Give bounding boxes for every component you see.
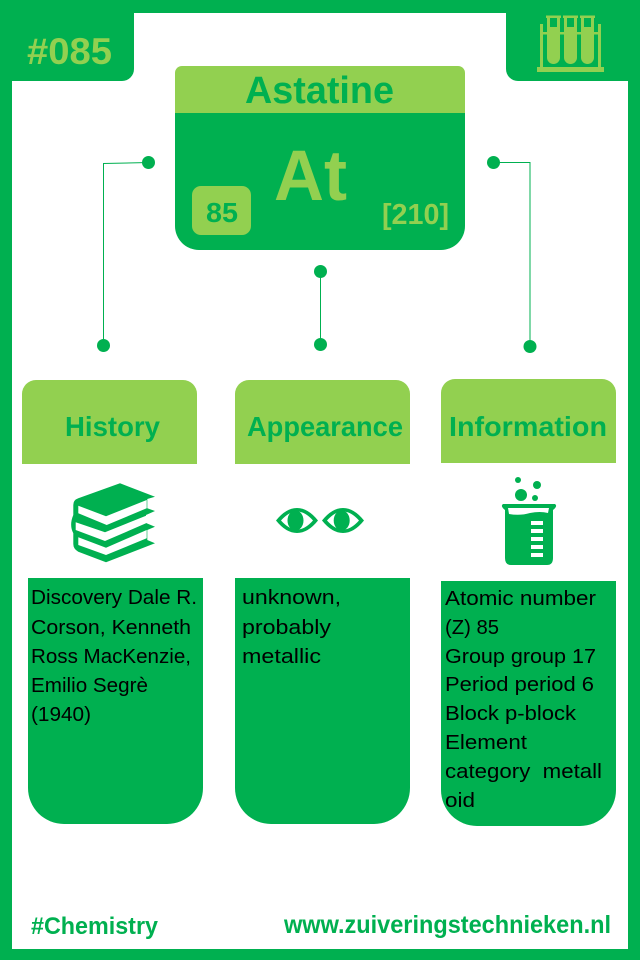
atomic mass: [210] — [382, 199, 449, 231]
panel: history — [22, 380, 203, 824]
icon: books — [71, 483, 155, 562]
connector: appearance — [314, 265, 327, 351]
information text panel: Group group 17 — [445, 646, 596, 668]
element name — [175, 66, 465, 113]
history heading: History — [65, 411, 160, 442]
history text panel: Corson, Kenneth — [31, 617, 191, 639]
appearance heading: Appearance — [247, 411, 403, 442]
element name: Astatine — [245, 70, 394, 112]
history heading — [22, 380, 197, 464]
appearance heading — [235, 380, 410, 464]
atomic number: 85 — [206, 197, 238, 228]
website footer: www.zuiveringstechnieken.nl — [283, 911, 611, 939]
history text panel — [28, 578, 203, 824]
number tab — [0, 0, 134, 81]
information text panel: Element — [445, 732, 527, 754]
panel: information — [441, 379, 616, 826]
information text panel: Atomic number — [445, 588, 596, 610]
connector: information — [487, 156, 536, 353]
history text panel: (1940) — [31, 704, 91, 726]
icon: beaker — [502, 477, 556, 565]
element symbol: At — [274, 137, 347, 216]
information text panel: Block p-block — [445, 703, 577, 725]
icon: eyes — [276, 508, 364, 533]
element card — [175, 66, 465, 250]
information text panel: (Z) 85 — [445, 617, 499, 639]
hashtag footer: #Chemistry — [31, 913, 159, 940]
information text panel: category metall — [445, 761, 602, 783]
information heading — [441, 379, 616, 463]
information text panel: oid — [445, 790, 475, 812]
connector: history — [97, 156, 155, 352]
atomic number — [192, 186, 251, 235]
information heading: Information — [449, 411, 607, 442]
icon tab: test tubes — [506, 0, 640, 81]
appearance text panel: probably — [242, 617, 331, 639]
history text panel: Ross MacKenzie, — [31, 646, 191, 668]
appearance text panel — [235, 578, 410, 824]
number tab: #085 — [27, 31, 112, 72]
information text panel — [441, 581, 616, 826]
appearance text panel: metallic — [242, 646, 321, 668]
history text panel: Discovery Dale R. — [31, 587, 197, 609]
panel: appearance — [235, 380, 410, 824]
appearance text panel: unknown, — [242, 587, 341, 609]
information text panel: Period period 6 — [445, 674, 594, 696]
history text panel: Emilio Segrè — [31, 675, 148, 697]
